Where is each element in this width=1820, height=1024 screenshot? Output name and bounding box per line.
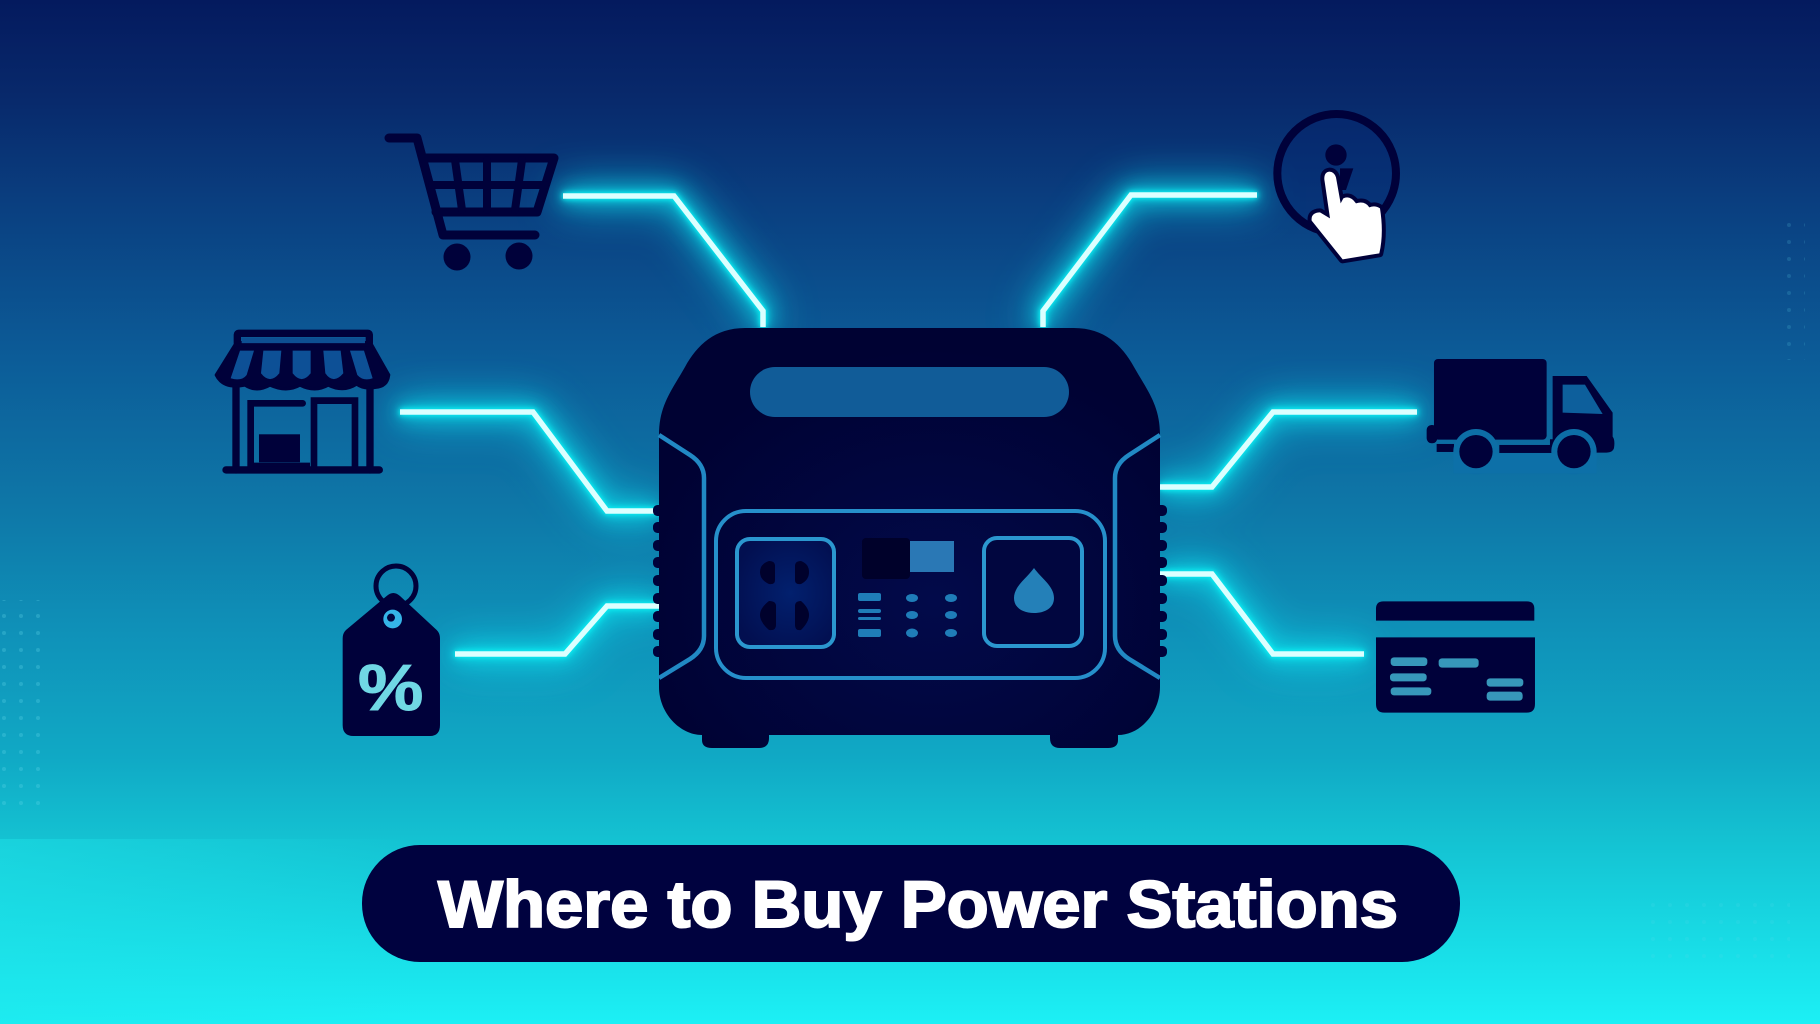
icon: storefront xyxy=(216,333,389,470)
percent sign: % xyxy=(358,651,423,724)
icon: click hand xyxy=(1277,114,1396,259)
body xyxy=(659,328,1160,748)
icon: shopping cart xyxy=(389,138,554,270)
vents xyxy=(653,505,1167,657)
connector: credit card xyxy=(1160,574,1364,654)
icon: credit card xyxy=(1376,601,1535,713)
connector: discount tag xyxy=(455,606,660,654)
connector: cart xyxy=(563,196,763,327)
icon: delivery truck xyxy=(1427,359,1614,474)
water drop port xyxy=(984,538,1082,646)
connector: delivery truck xyxy=(1160,412,1417,487)
connector: online click xyxy=(1043,195,1257,327)
icon: discount tag xyxy=(343,566,440,736)
connector: store xyxy=(400,412,658,511)
buttons and indicators xyxy=(858,593,957,638)
display xyxy=(862,538,954,579)
icon: power station xyxy=(653,328,1167,748)
title text: Where to Buy Power Stations xyxy=(438,867,1398,941)
handle xyxy=(750,367,1069,417)
title pill xyxy=(362,845,1460,962)
neon connector lines xyxy=(400,195,1417,654)
side trim lines xyxy=(659,435,1160,678)
AC socket xyxy=(737,539,834,647)
control panel xyxy=(716,511,1105,678)
